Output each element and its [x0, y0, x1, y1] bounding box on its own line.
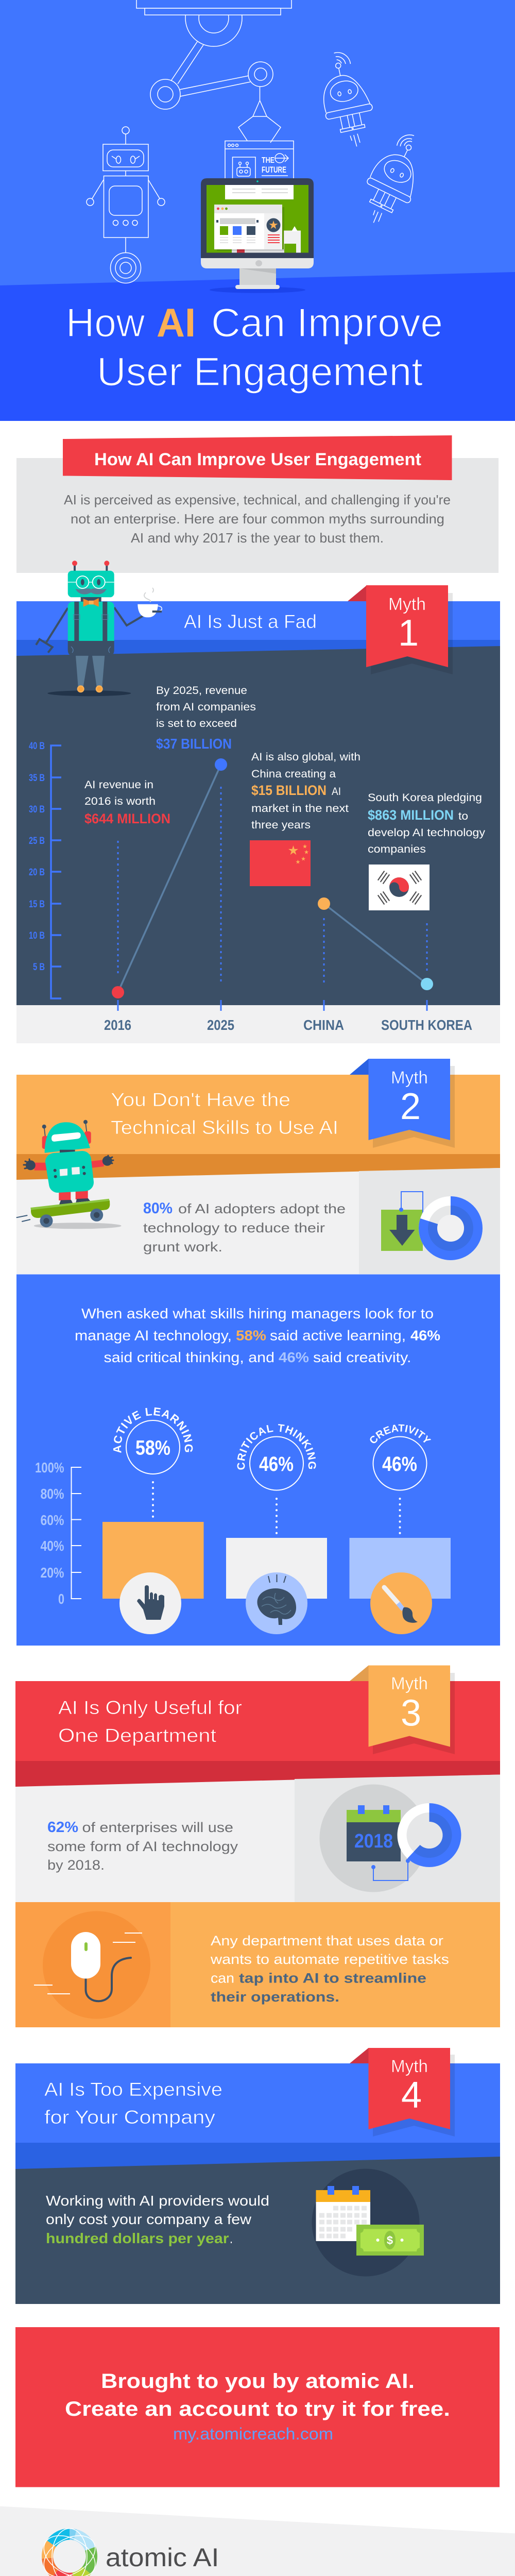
callout: critical thinking: CRITICAL THINKING: [237, 1424, 316, 1469]
intro text: AI is perceived as expensive, technical, and challenging if you're: [64, 492, 451, 507]
callout: critical thinking: 46%: [259, 1453, 294, 1476]
chart: percent axis: 0: [58, 1591, 64, 1607]
streamline text: tap into AI to streamline: [239, 1970, 426, 1986]
panel: myth 2: [16, 1059, 500, 1646]
callout: critical thinking: [237, 1424, 316, 1534]
icon: computer mouse: [34, 1932, 142, 2001]
illustration: robotic arm: [136, 0, 291, 143]
chart: y axis: [29, 740, 61, 998]
myth 2 heading: [111, 1089, 338, 1138]
skills text: said creativity.: [313, 1349, 411, 1365]
title: Can Improve: [211, 300, 443, 345]
hero panel: [0, 0, 515, 421]
skills text: manage AI technology,: [75, 1327, 232, 1344]
ribbon: myth 3: 3: [401, 1693, 421, 1734]
callout: China: AI is also global, with: [251, 751, 360, 763]
illustration: the future browser card: THE: [262, 156, 274, 165]
streamline text: can: [211, 1970, 234, 1986]
chart: y axis: 40 B: [29, 740, 45, 752]
callout: South Korea: develop AI technology: [368, 826, 485, 839]
flag: South Korea: [369, 865, 430, 910]
ribbon: myth 3: [350, 1665, 455, 1754]
callout: 2025 revenue: from AI companies: [156, 701, 256, 713]
chart: percent axis: 40%: [40, 1538, 64, 1554]
chart: percent axis: 100%: [35, 1460, 64, 1476]
skills text: [75, 1306, 440, 1365]
cost text: .: [230, 2230, 233, 2246]
icon: paint brush: [384, 1587, 418, 1623]
logo: atomic AI: atomic AI: [106, 2543, 219, 2572]
panel: myth 4: [15, 2048, 500, 2304]
streamline text: Any department that uses data or: [211, 1933, 443, 1948]
callout: 2016 revenue: [84, 778, 170, 826]
myth 3 heading: One Department: [58, 1725, 217, 1746]
panel: myth 3: [15, 1665, 500, 2027]
callout: China: three years: [251, 819, 311, 831]
ribbon: myth 1: 1: [398, 613, 419, 654]
icon: pointing hand: [137, 1585, 164, 1620]
chart: dotted guides, trend lines and points: [112, 758, 433, 998]
ribbon: myth 2: 2: [400, 1086, 421, 1127]
stat text: 80 percent: grunt work.: [143, 1239, 222, 1255]
footer band: [0, 2506, 515, 2576]
ribbon: myth 1: Myth: [388, 595, 426, 614]
callout: creativity: CREATIVITY: [370, 1424, 432, 1444]
panel: call to action: Brought to you by atomic AI.: [101, 2370, 415, 2393]
myth 1 heading: AI Is Just a Fad: [184, 611, 317, 632]
chart: y axis: 5 B: [33, 961, 45, 973]
icon: calendar and money: [312, 2169, 424, 2276]
panel: call to action: Create an account to try it for free.: [65, 2398, 450, 2420]
callout: active learning: [113, 1408, 193, 1518]
callout: China: market in the next: [251, 802, 349, 815]
bar: active learning: [102, 1522, 204, 1634]
callout: South Korea: [368, 791, 485, 855]
callout: South Korea: companies: [368, 843, 426, 855]
ribbon: myth 4: [350, 2048, 455, 2137]
chart: y axis: 10 B: [29, 930, 45, 941]
panel: streamline operations: [15, 1902, 500, 2027]
robot with coffee: [36, 561, 162, 696]
panel: introduction: [16, 435, 499, 573]
title: AI: [157, 300, 196, 345]
myth 4 heading: AI Is Too Expensive: [44, 2079, 222, 2100]
callout: active learning: 58%: [135, 1436, 170, 1459]
icon: calendar and money: $: [387, 2234, 393, 2247]
chart: x axis labels: 2016: [104, 1017, 131, 1033]
chart: x axis labels: [104, 1000, 472, 1033]
logo: atomic AI: [37, 2527, 219, 2576]
callout: 2025 revenue: $37 BILLION: [156, 736, 232, 752]
title: How: [66, 300, 145, 345]
callout: 2025 revenue: [156, 684, 256, 752]
ribbon: myth 4: 4: [401, 2075, 422, 2116]
streamline text: their operations.: [211, 1989, 339, 2005]
callout: 2016 revenue: $644 MILLION: [84, 811, 170, 826]
skills text: 46%: [279, 1349, 309, 1365]
chart: y axis: 15 B: [29, 899, 45, 910]
callout: 2016 revenue: AI revenue in: [84, 778, 153, 791]
myth 2 heading: You Don't Have the: [111, 1089, 290, 1110]
myth 4 heading: for Your Company: [44, 2107, 216, 2128]
callout: creativity: [370, 1424, 432, 1534]
illustration: desktop monitor: [201, 178, 314, 293]
myth 2 heading: Technical Skills to Use AI: [111, 1117, 338, 1138]
chart: percent axis: 80%: [40, 1486, 64, 1502]
stat text: 62 percent: of enterprises will use: [82, 1820, 233, 1835]
skills text: said critical thinking, and: [104, 1349, 274, 1365]
ribbon: myth 2: Myth: [391, 1068, 428, 1088]
ribbon: myth 1: [348, 585, 453, 674]
chart: x axis labels: CHINA: [303, 1017, 344, 1033]
icon: calendar and donut chart: 2018: [354, 1831, 393, 1852]
icon: download and donut chart: [381, 1192, 473, 1251]
callout: creativity: 46%: [382, 1453, 417, 1476]
icon: brain: [257, 1574, 296, 1625]
chart: y axis: 30 B: [29, 804, 45, 815]
callout: China: AI: [332, 785, 341, 798]
callout: China: China creating a: [251, 768, 336, 780]
callout: active learning: ACTIVE LEARNING: [113, 1408, 193, 1453]
chart: percent axis: 20%: [40, 1565, 64, 1581]
streamline text: [210, 1933, 449, 2005]
intro text: not an enterprise. Here are four common myths surrounding: [71, 511, 444, 527]
stat text: 80 percent: of AI adopters adopt the: [178, 1201, 346, 1216]
chart: y axis: 25 B: [29, 835, 45, 846]
banner heading: How AI Can Improve User Engagement: [94, 450, 421, 469]
chart: percent axis: 60%: [40, 1512, 64, 1528]
chart: y axis: 20 B: [29, 867, 45, 878]
ribbon: myth 3: Myth: [391, 1674, 428, 1693]
callout: 2025 revenue: By 2025, revenue: [156, 684, 247, 697]
chart: y axis: 35 B: [29, 772, 45, 784]
robot on skateboard: [16, 1120, 122, 1229]
cost text: [46, 2193, 269, 2246]
title: User Engagement: [97, 349, 423, 394]
intro text: [64, 492, 451, 546]
illustration: flying robot one: [316, 53, 380, 151]
stat text: 62 percent: by 2018.: [47, 1857, 105, 1873]
panel: call to action: [15, 2327, 500, 2487]
callout: 2025 revenue: is set to exceed: [156, 717, 237, 730]
chart: x axis labels: SOUTH KOREA: [381, 1017, 472, 1033]
flag: China: [250, 840, 311, 886]
chart: percent axis: [35, 1460, 81, 1607]
panel: hiring skills: [16, 1275, 500, 1646]
callout: 2016 revenue: 2016 is worth: [84, 795, 156, 807]
illustration: the future browser card: FUTURE: [262, 165, 286, 175]
skills text: When asked what skills hiring managers look for to: [81, 1306, 434, 1321]
cost text: Working with AI providers would: [46, 2193, 269, 2209]
title: [66, 300, 443, 394]
stat text: 62 percent: 62%: [47, 1819, 78, 1836]
cost text: hundred dollars per year: [46, 2230, 229, 2246]
callout: South Korea: to: [458, 810, 468, 822]
panel: call to action: my.atomicreach.com: [173, 2425, 333, 2443]
illustration: flying robot two: [352, 135, 432, 233]
icon: calendar and donut chart: [319, 1785, 452, 1892]
illustration: the future browser card: [225, 141, 294, 182]
stat text: 62 percent: [47, 1819, 238, 1873]
callout: South Korea: South Korea pledging: [368, 791, 482, 804]
bar: creativity: [349, 1538, 451, 1634]
ribbon: myth 2: [350, 1059, 455, 1148]
intro text: AI and why 2017 is the year to bust them.: [131, 530, 384, 546]
myth 3 heading: AI Is Only Useful for: [58, 1697, 242, 1718]
callout: China: $15 BILLION: [251, 783, 327, 798]
stat text: 80 percent: [143, 1200, 346, 1255]
illustration: outlined robot: [87, 127, 165, 283]
skills text: 46%: [410, 1327, 440, 1344]
myth 4 heading: [44, 2079, 222, 2128]
cost text: only cost your company a few: [46, 2211, 252, 2227]
callout: South Korea: $863 MILLION: [368, 807, 454, 823]
stat text: 80 percent: technology to reduce their: [143, 1220, 325, 1235]
banner heading: [63, 435, 452, 480]
stat text: 80 percent: 80%: [143, 1200, 173, 1217]
bar: critical thinking: [226, 1538, 327, 1634]
panel: myth 1: [16, 561, 500, 1043]
skills text: said active learning,: [270, 1327, 406, 1344]
skills text: 58%: [236, 1327, 266, 1344]
callout: China: [251, 751, 360, 831]
myth 3 heading: [58, 1697, 242, 1746]
ribbon: myth 4: Myth: [391, 2057, 428, 2076]
stat text: 62 percent: some form of AI technology: [47, 1839, 238, 1854]
streamline text: wants to automate repetitive tasks: [210, 1952, 449, 1967]
chart: x axis labels: 2025: [207, 1017, 234, 1033]
